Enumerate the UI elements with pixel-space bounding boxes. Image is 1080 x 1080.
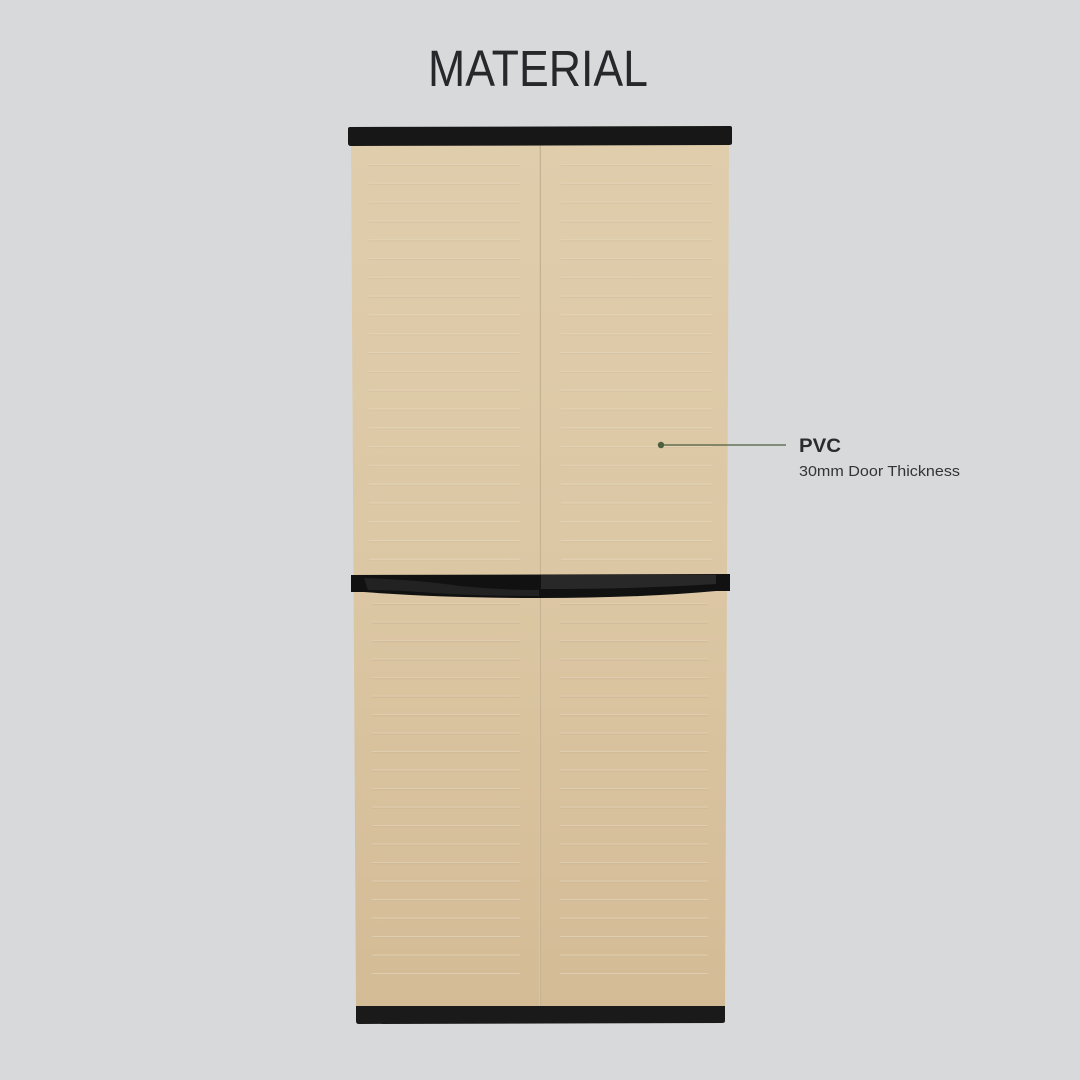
left door lower slatted panel — [372, 603, 520, 991]
callout description: 30mm Door Thickness — [799, 463, 960, 480]
right door lower slatted panel — [560, 603, 708, 991]
left door — [351, 145, 539, 1007]
handle bar — [351, 574, 730, 598]
right door upper slatted panel — [561, 164, 712, 562]
cabinet — [348, 126, 732, 1024]
top cap — [348, 126, 732, 146]
right door — [541, 145, 729, 1007]
callout heading: PVC — [799, 436, 841, 457]
bottom cap — [356, 1006, 725, 1024]
left door upper slatted panel — [369, 164, 520, 562]
callout dot — [658, 442, 664, 448]
callout: PVC — [658, 436, 960, 480]
door gap — [540, 145, 541, 1007]
callout line — [661, 444, 786, 446]
title: MATERIAL — [428, 40, 648, 97]
